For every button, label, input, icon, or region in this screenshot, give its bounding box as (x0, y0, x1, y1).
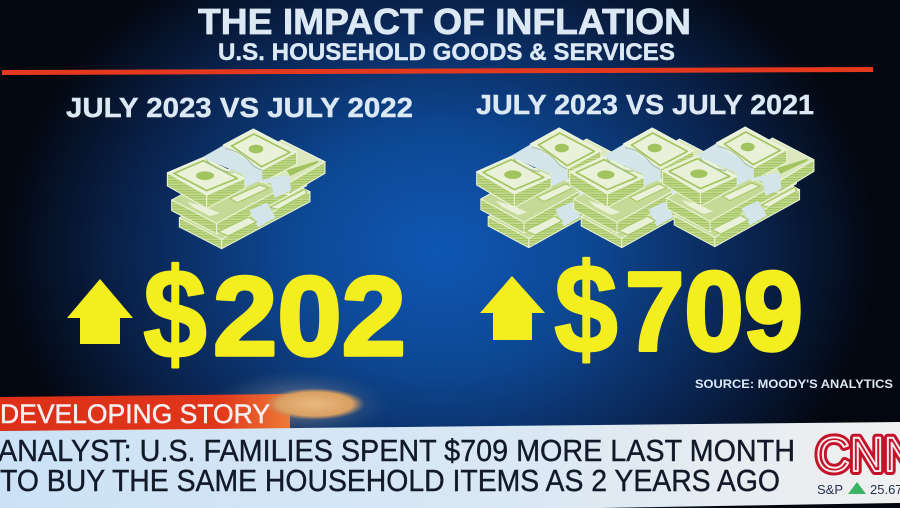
value: $ (554, 238, 618, 381)
value (554, 238, 803, 381)
value: 709 (625, 249, 803, 374)
market ticker (817, 482, 900, 497)
lower third headline: ANALYST: U.S. FAMILIES SPENT $709 MORE LAST MONTH (0, 433, 795, 468)
icon: stack of money (167, 129, 325, 249)
ticker: developing story: DEVELOPING STORY (0, 399, 270, 429)
value (143, 243, 406, 386)
icon: up arrow (480, 276, 545, 340)
lower third headline: TO BUY THE SAME HOUSEHOLD ITEMS AS 2 YEARS AGO (0, 463, 780, 498)
heading: JULY 2023 VS JULY 2021 (476, 89, 814, 120)
source note: SOURCE: MOODY'S ANALYTICS (695, 377, 893, 391)
value: 202 (213, 254, 406, 379)
lower third headline (0, 422, 900, 508)
panel: July 2023 vs July 2021 (476, 89, 814, 381)
market ticker: S&P (817, 482, 843, 497)
red divider (2, 67, 873, 75)
icon: three stacks of money (477, 127, 814, 248)
panel: July 2023 vs July 2022 (66, 92, 413, 386)
value: $ (143, 243, 207, 386)
title: THE IMPACT OF INFLATION (198, 1, 691, 42)
heading: JULY 2023 VS JULY 2022 (66, 92, 413, 123)
ticker: developing story (0, 370, 390, 440)
subtitle: U.S. HOUSEHOLD GOODS & SERVICES (218, 39, 675, 66)
icon: up arrow (67, 279, 133, 344)
